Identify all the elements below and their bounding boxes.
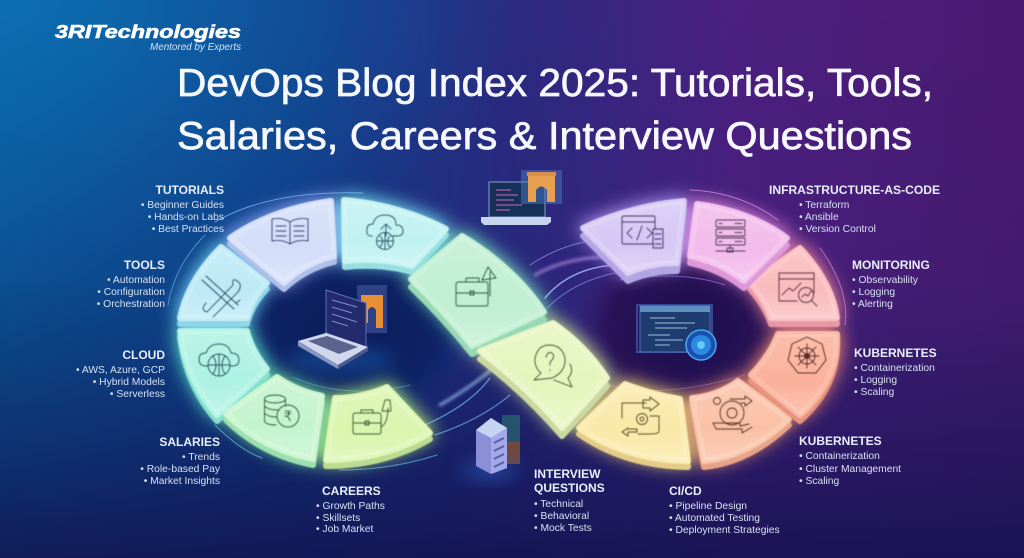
icon: cloud globe <box>199 344 239 376</box>
label: tutorials: • Beginner Guides <box>141 200 224 211</box>
icon: kubernetes helm <box>788 337 826 373</box>
icon: wrench and screwdriver <box>202 276 240 317</box>
illustration: central laptop with gate <box>285 285 395 372</box>
label: infrastructure-as-code: • Terraform <box>799 200 849 211</box>
icon: question bubbles <box>534 345 572 387</box>
logo: 3RITechnologies <box>55 22 241 42</box>
label: kubernetes upper: • Logging <box>854 375 897 386</box>
label: interview questions: • Technical <box>534 499 583 510</box>
label: cloud: • Hybrid Models <box>93 377 165 388</box>
label: kubernetes lower: • Cluster Management <box>799 464 901 475</box>
label: tutorials <box>141 183 224 235</box>
label: ci/cd: • Automated Testing <box>669 513 760 524</box>
icon: briefcase up arrow <box>456 267 496 306</box>
label: careers: CAREERS <box>322 484 381 498</box>
label: salaries: • Role-based Pay <box>140 464 221 475</box>
label: interview questions: • Behavioral <box>534 511 589 522</box>
label: tools: TOOLS <box>124 258 165 272</box>
tile: monitoring <box>750 248 837 324</box>
label: cloud: • Serverless <box>110 389 165 400</box>
tile: ci/cd <box>579 384 688 467</box>
label: interview questions <box>534 467 605 534</box>
icon: server rack <box>716 220 745 252</box>
label: salaries: • Market Insights <box>144 476 220 487</box>
label: ci/cd: CI/CD <box>669 484 702 498</box>
label: interview questions: • Mock Tests <box>534 523 592 534</box>
label: kubernetes upper <box>854 346 937 398</box>
tile: kubernetes lower <box>692 381 789 467</box>
tile: cloud upload <box>344 200 446 272</box>
label: monitoring: • Observability <box>852 275 919 286</box>
label: interview questions: QUESTIONS <box>534 481 605 495</box>
logo: Mentored by Experts <box>150 42 241 53</box>
label: infrastructure-as-code: • Ansible <box>799 212 839 223</box>
tile: tutorials <box>230 201 334 289</box>
label: monitoring: MONITORING <box>852 258 930 272</box>
label: tools <box>97 258 165 310</box>
label: careers: • Skillsets <box>316 513 360 524</box>
label: tutorials: • Best Practices <box>152 224 224 235</box>
icon: dashboard magnifier <box>779 273 817 306</box>
title <box>177 62 933 158</box>
label: tutorials: TUTORIALS <box>156 183 224 197</box>
icon: pipeline loop gear <box>622 397 659 436</box>
tile: tools <box>180 247 267 324</box>
label: careers: • Job Market <box>316 524 374 535</box>
label: tools: • Automation <box>107 275 165 286</box>
label: kubernetes lower: • Scaling <box>799 476 840 487</box>
tile: infrastructure <box>690 204 787 288</box>
label: salaries: • Trends <box>182 452 220 463</box>
label: kubernetes lower: KUBERNETES <box>799 434 882 448</box>
label: salaries: SALARIES <box>159 435 220 449</box>
illustration: server tower <box>462 415 520 480</box>
icon: open book <box>272 218 308 244</box>
label: cloud <box>76 348 165 400</box>
label: infrastructure-as-code: INFRASTRUCTURE-AS-CODE <box>769 183 940 197</box>
tile: salaries <box>226 377 322 465</box>
label: careers: • Growth Paths <box>316 501 385 512</box>
tile glow <box>180 200 837 461</box>
tile: interview <box>480 323 607 436</box>
icon: turbine gear arrows <box>713 396 752 433</box>
label: monitoring: • Alerting <box>852 299 893 310</box>
label: infrastructure-as-code <box>769 183 940 235</box>
tile: job trends <box>411 236 544 354</box>
icon: cloud upload globe <box>367 215 403 250</box>
illustration: code screen with chakra <box>637 305 716 360</box>
label: ci/cd: • Deployment Strategies <box>669 525 780 536</box>
label: ci/cd: • Pipeline Design <box>669 501 747 512</box>
tile: careers <box>326 387 430 466</box>
icon: briefcase up arrow <box>353 400 391 434</box>
label: salaries <box>140 435 221 487</box>
logo <box>55 22 241 53</box>
icon: code window <box>622 216 663 248</box>
label: kubernetes lower: • Containerization <box>799 451 880 462</box>
label: monitoring <box>852 258 930 310</box>
tile: kubernetes upper <box>751 334 837 421</box>
label: tools: • Configuration <box>97 287 165 298</box>
tile: iac code <box>583 201 684 281</box>
label: infrastructure-as-code: • Version Control <box>799 224 876 235</box>
label: cloud: • AWS, Azure, GCP <box>76 365 165 376</box>
tile: cloud <box>180 331 267 421</box>
label: tutorials: • Hands-on Labs <box>148 212 224 223</box>
label: interview questions: INTERVIEW <box>534 467 601 481</box>
glow arcs and light streaks <box>168 190 846 470</box>
label: tools: • Orchestration <box>97 299 165 310</box>
label: kubernetes lower <box>799 434 901 487</box>
title: Salaries, Careers & Interview Questions <box>177 115 912 158</box>
label: kubernetes upper: • Containerization <box>854 363 935 374</box>
label: monitoring: • Logging <box>852 287 895 298</box>
illustration: top laptop with gate <box>481 170 562 225</box>
label: cloud: CLOUD <box>122 348 165 362</box>
label: ci/cd <box>669 484 780 536</box>
label: kubernetes upper: • Scaling <box>854 387 895 398</box>
label: kubernetes upper: KUBERNETES <box>854 346 937 360</box>
icon: coins with rupee: ₹ <box>284 408 293 424</box>
title: DevOps Blog Index 2025: Tutorials, Tools, <box>177 62 933 105</box>
label: careers <box>316 484 385 535</box>
